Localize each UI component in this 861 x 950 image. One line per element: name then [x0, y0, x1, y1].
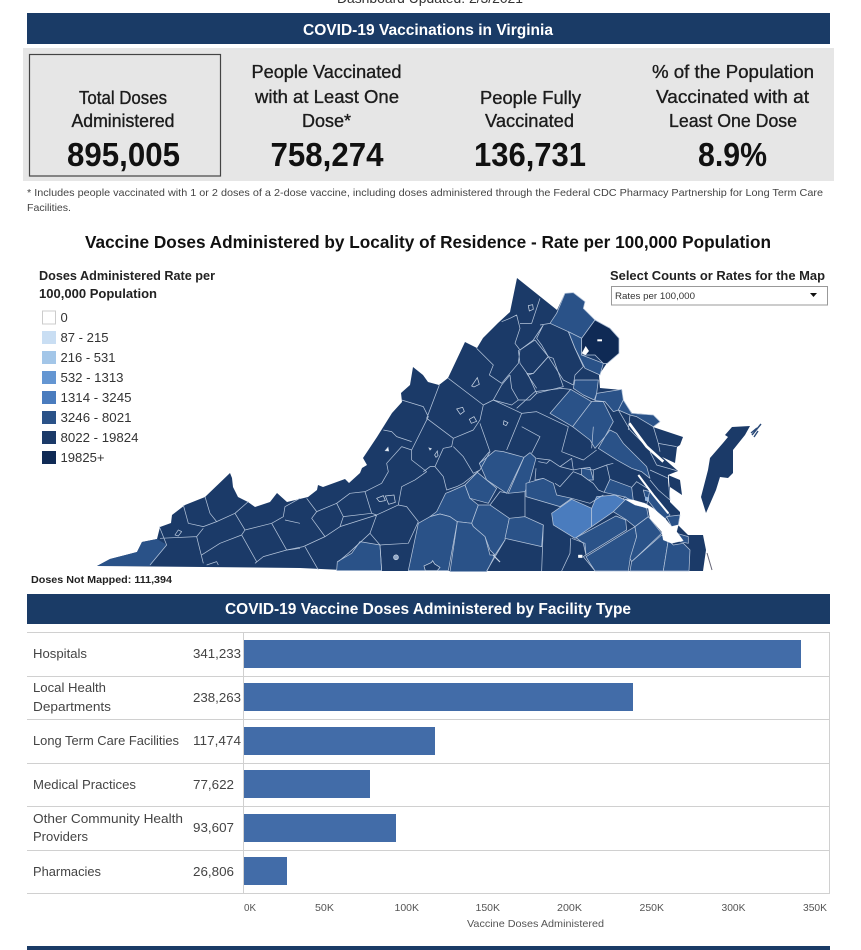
panel: key metrics — [23, 48, 834, 181]
footnote — [27, 187, 823, 214]
metric: percent of population: Vaccinated with at — [656, 87, 809, 107]
bar: Local Health Departments — [33, 680, 633, 714]
x axis ticks: 350K — [803, 902, 827, 914]
map: eastern shore islands — [751, 424, 761, 437]
map selector dropdown: Rates per 100,000 — [615, 291, 695, 302]
map: light blue counties — [552, 495, 625, 538]
metric: percent of population: Least One Dose — [669, 111, 797, 131]
map legend: 19825+ — [60, 450, 104, 465]
bar: Pharmacies — [33, 857, 287, 885]
map: independent city outlines — [377, 305, 533, 571]
metric: people vaccinated with at least one dose: People Vaccinated — [252, 62, 402, 82]
metric: people fully vaccinated: 136,731 — [474, 136, 586, 173]
metric: percent of population: % of the Population — [652, 62, 814, 82]
map: central-east county boundaries — [479, 388, 677, 571]
map: lighter northern counties — [550, 293, 603, 375]
map: darkest county — [582, 320, 619, 363]
map legend: Doses Administered Rate per — [39, 268, 215, 283]
bar: Other Community Health Providers: Providers — [33, 829, 88, 844]
bar: Long Term Care Facilities: Long Term Care Facilities — [33, 733, 179, 748]
map legend: 532 - 1313 — [60, 370, 124, 385]
x axis ticks — [244, 902, 827, 914]
map legend: 3246 - 8021 — [60, 410, 132, 425]
next section header (cropped) — [27, 946, 830, 950]
map legend: 0 — [60, 310, 68, 325]
x axis ticks: 150K — [476, 902, 500, 914]
metric: total doses administered: 895,005 — [67, 136, 180, 173]
map: lighter south-central counties — [337, 485, 478, 571]
metric: people vaccinated with at least one dose: with at Least One — [254, 87, 399, 107]
bar: Local Health Departments: Departments — [33, 699, 112, 714]
header: doses by facility type — [27, 594, 830, 624]
footnote: * Includes people vaccinated with 1 or 2 doses of a 2-dose vaccine, including doses administered through the Federal CDC Pharmacy Partnership for Long Term Care — [27, 187, 823, 199]
doses not mapped note: Doses Not Mapped: 111,394 — [31, 574, 172, 586]
metric: percent of population: 8.9% — [698, 136, 767, 173]
map: white specks in northern counties — [582, 339, 602, 355]
map: central and western county boundaries — [287, 298, 563, 571]
x axis ticks: 200K — [557, 902, 582, 914]
bar: Medical Practices: 77,622 — [193, 777, 234, 792]
x axis ticks: 100K — [394, 902, 419, 914]
map: eastern shore — [701, 426, 750, 513]
map legend: 8022 - 19824 — [60, 430, 138, 445]
metric: total doses administered — [30, 54, 220, 176]
bar: Pharmacies: 26,806 — [193, 864, 234, 879]
metric: people fully vaccinated — [474, 88, 586, 173]
map legend: 100,000 Population — [39, 286, 157, 301]
metric: people vaccinated with at least one dose — [252, 62, 402, 173]
x axis ticks: 50K — [315, 902, 334, 914]
bar: Other Community Health Providers: 93,607 — [193, 820, 234, 835]
metric: people fully vaccinated: Vaccinated — [485, 111, 574, 131]
x axis ticks: 0K — [244, 902, 256, 914]
map: cape charles line — [707, 553, 712, 570]
metric: percent of population — [652, 62, 814, 173]
metric: people fully vaccinated: People Fully — [480, 88, 581, 108]
map selector dropdown — [610, 268, 828, 305]
map: lighter central and tidewater counties — [450, 380, 690, 572]
bar: Pharmacies: Pharmacies — [33, 864, 101, 879]
x axis ticks: 250K — [640, 902, 664, 914]
map legend: 216 - 531 — [60, 350, 116, 365]
map selector dropdown: Select Counts or Rates for the Map — [610, 268, 825, 283]
header: COVID-19 Vaccinations in Virginia — [27, 13, 830, 44]
map legend — [39, 268, 215, 465]
footnote: Facilities. — [27, 202, 71, 214]
map legend: 87 - 215 — [60, 330, 108, 345]
map: river gaps and coastline water — [578, 379, 683, 558]
bar: Hospitals: Hospitals — [33, 646, 88, 661]
x axis title: Vaccine Doses Administered — [467, 918, 604, 930]
metric: total doses administered: Administered — [72, 111, 174, 131]
header: COVID-19 Vaccinations in Virginia: COVID-19 Vaccinations in Virginia — [303, 22, 553, 39]
map legend: 1314 - 3245 — [60, 390, 132, 405]
bar: Medical Practices — [33, 770, 370, 798]
bar: Hospitals — [33, 640, 801, 668]
map: southwest county boundaries — [150, 497, 300, 565]
bar: Local Health Departments: Local Health — [33, 680, 106, 695]
bar chart: doses by facility type — [27, 632, 830, 930]
map: short boundary stub — [493, 555, 500, 562]
bar: Long Term Care Facilities: 117,474 — [193, 733, 241, 748]
metric: people vaccinated with at least one dose: 758,274 — [270, 136, 384, 173]
metric: people vaccinated with at least one dose: Dose* — [302, 111, 351, 131]
map: lee county — [97, 539, 167, 566]
x axis ticks: 300K — [722, 902, 746, 914]
bar: Medical Practices: Medical Practices — [33, 777, 136, 792]
header: doses by facility type: COVID-19 Vaccine Doses Administered by Facility Type — [225, 601, 631, 618]
map title: Vaccine Doses Administered by Locality of Residence - Rate per 100,000 Population — [85, 232, 771, 252]
bar: Other Community Health Providers — [33, 811, 396, 844]
map: northeastern county boundaries — [520, 323, 583, 388]
bar: Long Term Care Facilities — [33, 727, 435, 755]
metric: total doses administered: Total Doses — [79, 88, 167, 108]
bar: Hospitals: 341,233 — [193, 646, 241, 661]
choropleth map of Virginia — [97, 278, 761, 572]
map: state base — [97, 278, 706, 571]
map: lightest independent city — [645, 497, 649, 502]
bar: Local Health Departments: 238,263 — [193, 690, 241, 705]
bar: Other Community Health Providers: Other Community Health — [33, 811, 183, 826]
